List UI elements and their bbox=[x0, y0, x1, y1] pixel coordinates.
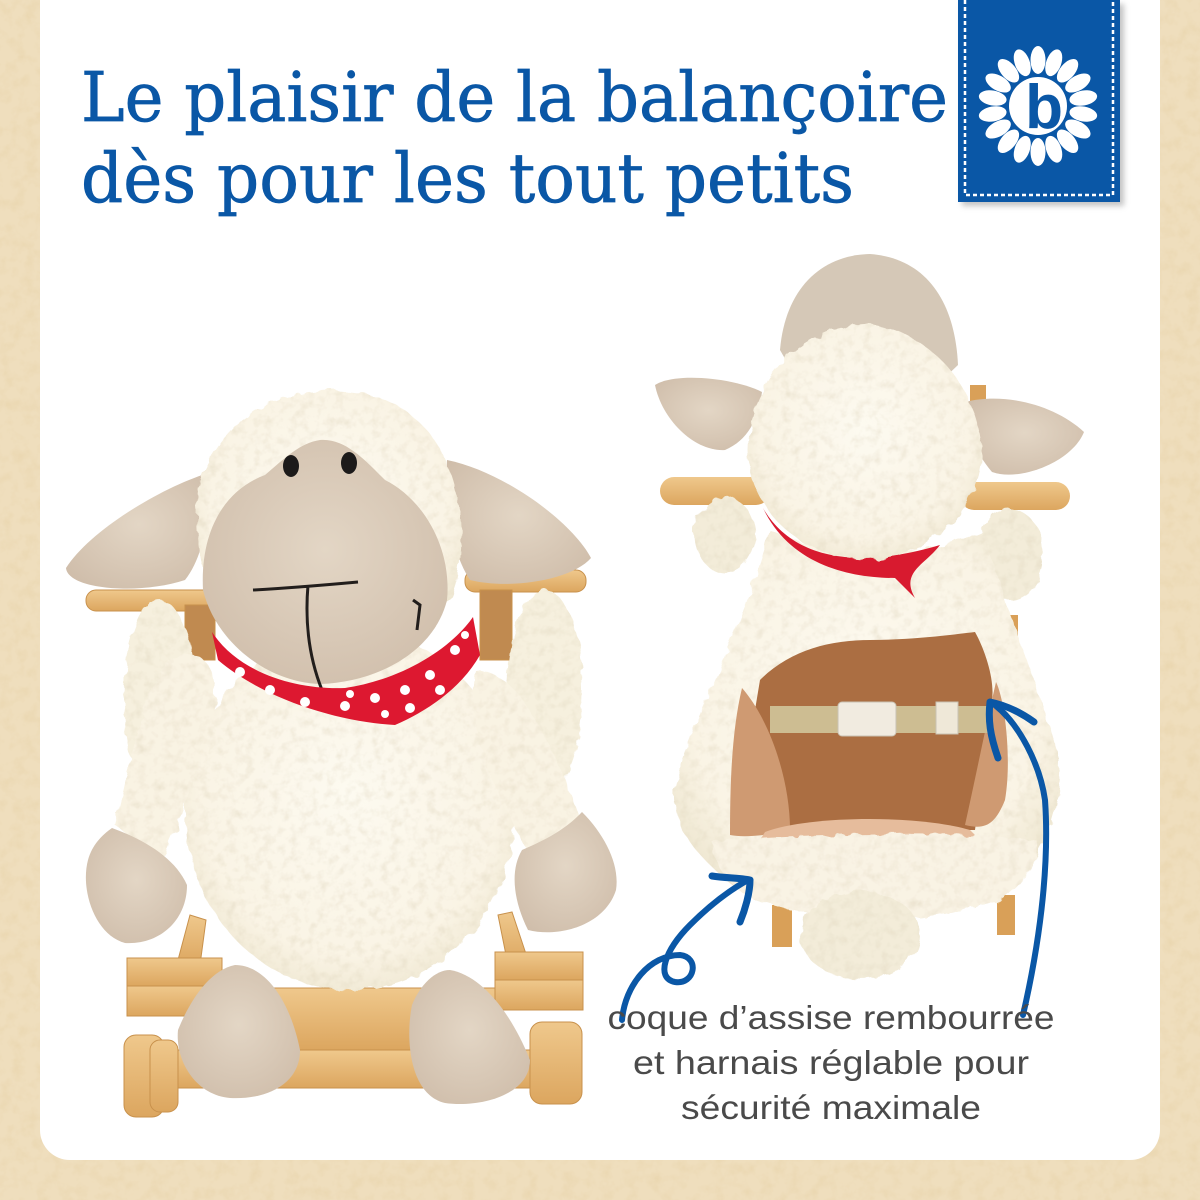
arrow: to seat shell bbox=[622, 876, 750, 1020]
title: Le plaisir de la balançoire bbox=[81, 59, 948, 138]
rear wood pieces bbox=[733, 632, 755, 692]
nose bbox=[780, 254, 958, 420]
harness buckle bbox=[838, 702, 896, 736]
illustration: top view of seat bbox=[655, 254, 1084, 979]
mouth bbox=[253, 582, 420, 690]
arrow: to harness bbox=[989, 702, 1046, 1015]
side legs bbox=[695, 497, 755, 573]
muzzle bbox=[203, 440, 448, 684]
mitts bbox=[86, 828, 187, 943]
body fleece bbox=[185, 630, 515, 990]
feet bbox=[178, 965, 300, 1098]
caption: et harnais réglable pour bbox=[633, 1044, 1029, 1081]
handle bar bbox=[970, 385, 986, 415]
front fleece lip bbox=[712, 834, 1037, 918]
title bbox=[81, 59, 948, 219]
harness strap bbox=[770, 706, 990, 733]
seat front cushion bbox=[760, 819, 980, 840]
tail bbox=[800, 891, 920, 979]
seat back: brown plush bbox=[735, 632, 993, 830]
caption bbox=[608, 999, 1054, 1126]
logo: brand badge bbox=[958, 0, 1124, 206]
bandana bbox=[212, 617, 480, 725]
title: dès pour les tout petits bbox=[81, 140, 854, 219]
bandana bbox=[763, 508, 940, 598]
arms bbox=[115, 654, 215, 860]
seat cushion sides bbox=[730, 688, 790, 836]
back arms bbox=[124, 600, 196, 800]
rocker base bbox=[86, 570, 586, 1117]
icon: flower petals bbox=[978, 46, 1098, 166]
caption: sécurité maximale bbox=[681, 1089, 981, 1126]
fleece shell bbox=[674, 530, 1060, 918]
illustration: front view of sheep rocker bbox=[66, 390, 617, 1117]
head fleece bbox=[197, 390, 461, 650]
logo: brand badge: b bbox=[1025, 73, 1063, 142]
ears bbox=[655, 378, 762, 450]
eyes bbox=[283, 455, 299, 477]
caption: coque d’assise rembourrée bbox=[608, 999, 1054, 1036]
ears bbox=[66, 472, 212, 589]
head fleece from above bbox=[748, 324, 982, 560]
